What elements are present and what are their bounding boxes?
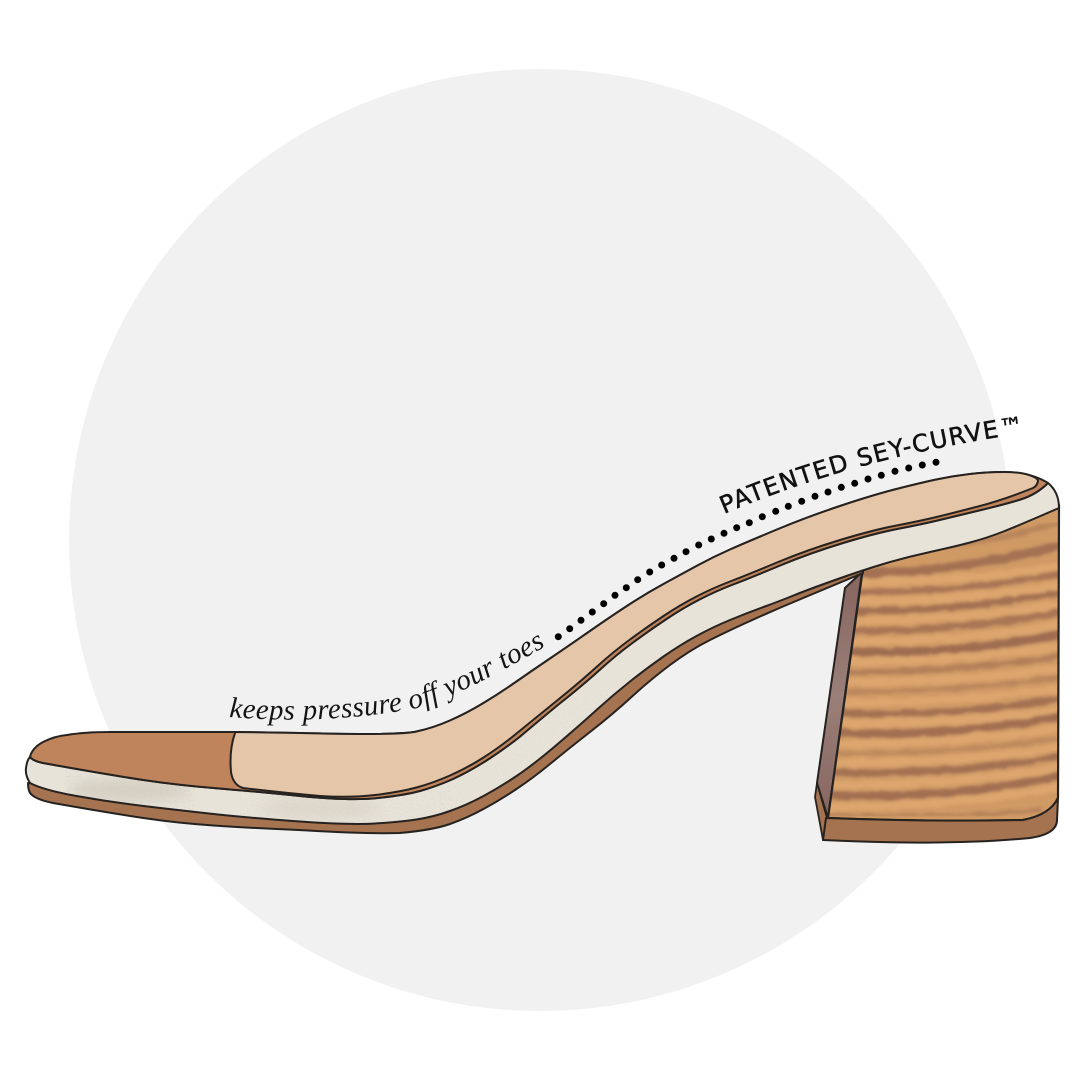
block heel — [815, 505, 1062, 843]
cream midsole — [26, 483, 1059, 830]
heel wedge base — [815, 783, 827, 840]
outsole — [28, 565, 863, 833]
shoe illustration — [26, 472, 1062, 843]
heel side panel — [817, 572, 862, 818]
heel bottom cap — [823, 798, 1058, 843]
heading: patented sey-curve: PATENTED SEY-CURVE™ — [719, 416, 1018, 514]
dotted curve line — [555, 459, 940, 640]
tagline: keeps pressure off your toes: keeps pressure off your toes — [230, 635, 544, 726]
toe brown insole — [30, 472, 1048, 799]
heel wood face — [820, 505, 1062, 821]
beige footbed — [230, 472, 1038, 797]
background circle — [69, 69, 1011, 1011]
